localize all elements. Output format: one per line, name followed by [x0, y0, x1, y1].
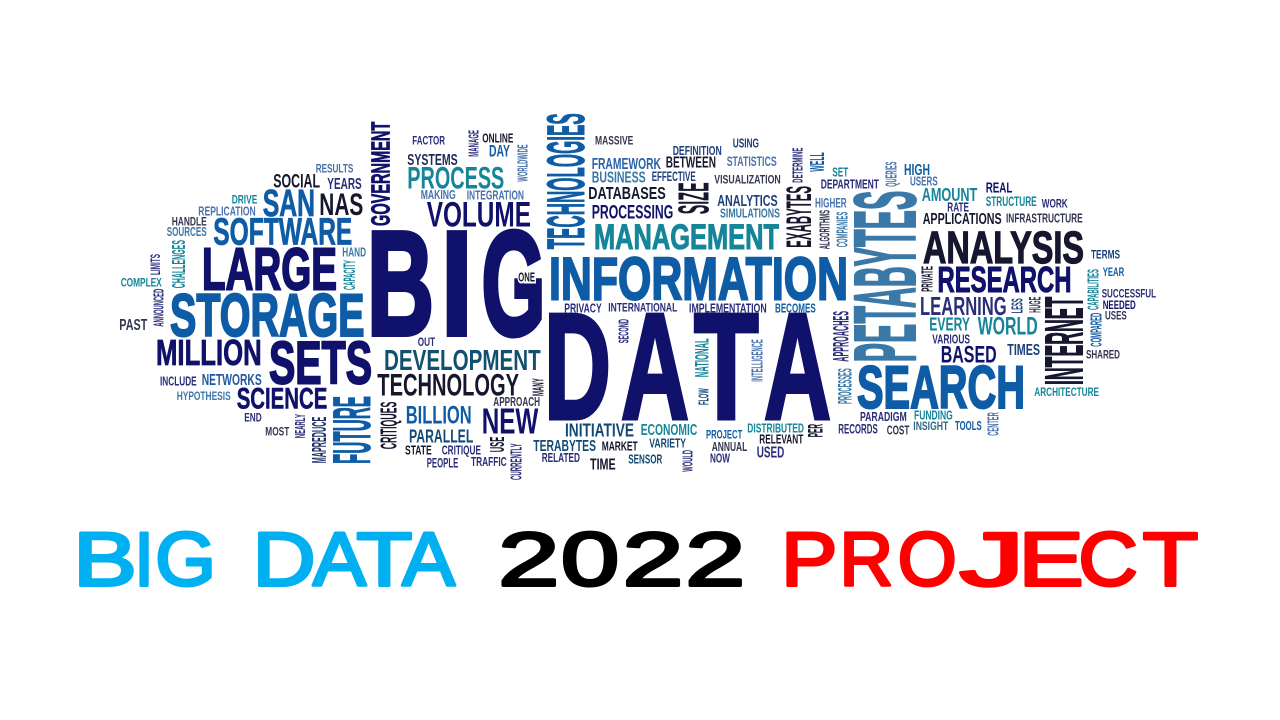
words: top-middle cluster: DETERMINE — [789, 148, 806, 183]
words: right cluster: VARIOUS — [932, 331, 970, 346]
word: NEW: NEW — [482, 400, 539, 441]
word: BIG: G — [482, 202, 546, 366]
words: upper-centre cluster: FACTOR — [412, 133, 445, 147]
words: top-middle cluster: PROCESSING — [592, 202, 673, 223]
words: right cluster: NEEDED — [1103, 298, 1136, 312]
words: upper-right cluster: HIGH — [904, 162, 930, 179]
words: lower-left cluster — [119, 289, 402, 463]
words: right cluster: APPROACHES — [828, 311, 853, 362]
words: lower-centre cluster: ANNUAL — [712, 440, 748, 454]
word: SEARCH: SEARCH — [857, 354, 1025, 421]
words: lower-left cluster: INCLUDE — [160, 375, 197, 389]
words: right cluster: PROCESSES — [836, 368, 857, 404]
words: upper-left cluster: RESULTS — [316, 161, 353, 175]
title word: 2022: 2 — [685, 518, 745, 602]
word cloud: MANAGE — [465, 130, 482, 157]
words: top-middle cluster: FRAMEWORK — [592, 156, 661, 173]
words: upper-centre cluster: INTEGRATION — [467, 187, 524, 202]
words: lower-centre cluster: MANY — [530, 378, 547, 396]
title word: BIG DATA: A — [313, 518, 366, 602]
word cloud: SIZE — [669, 182, 718, 214]
words: right cluster: TOOLS — [955, 418, 982, 433]
words: lower-centre cluster: BECOMES — [775, 300, 816, 315]
words: right cluster: SHARED — [1086, 347, 1120, 361]
word: DATA: A — [764, 282, 831, 450]
title word: PROJECT: C — [1078, 518, 1138, 602]
word: STORAGE: STORAGE — [170, 282, 364, 349]
words: lower-left cluster: MOST — [265, 424, 290, 438]
words: upper-left cluster: HANDLE — [172, 215, 207, 229]
words: top-middle cluster: STATISTICS — [727, 154, 777, 169]
words: top-middle cluster: DEFINITION — [673, 143, 722, 158]
word: SAN: SAN — [263, 183, 315, 225]
word: NAS: NAS — [319, 186, 363, 222]
title word: BIG DATA: T — [356, 518, 412, 602]
words: upper-left cluster: CAPACITY — [340, 260, 359, 290]
words: upper-right cluster: RATE — [947, 200, 969, 215]
words: top-middle cluster: EFFECTIVE — [652, 169, 696, 184]
word cloud: INTERNET — [1034, 297, 1094, 385]
words: right cluster — [828, 247, 1156, 437]
words: upper-left cluster: LIMITS — [147, 254, 163, 275]
words: right cluster: EVERY — [929, 315, 970, 335]
words: right cluster: RECORDS — [838, 421, 878, 436]
word: BIG: B — [367, 202, 434, 366]
words: lower-centre cluster: PEOPLE — [427, 456, 458, 471]
word cloud — [119, 113, 1156, 480]
words: lower-centre cluster: INITIATIVE — [565, 421, 634, 441]
words: upper-right cluster: USERS — [910, 174, 938, 189]
words: upper-centre cluster: SYSTEMS — [407, 152, 458, 169]
words: upper-right cluster: WORK — [1042, 197, 1068, 211]
word: LEARNING: LEARNING — [920, 293, 1007, 321]
words: lower-left cluster: NEARLY — [293, 414, 309, 438]
words: lower-centre cluster: SECOND — [615, 319, 632, 343]
words: upper-right cluster: DEPARTMENT — [821, 176, 879, 191]
words: lower-centre cluster: PER — [805, 424, 828, 437]
title word: BIG DATA: A — [402, 518, 455, 602]
word: ANALYSIS: ANALYSIS — [923, 222, 1084, 273]
words: lower-centre cluster: DISTRIBUTED — [747, 420, 804, 435]
words: right cluster: TERMS — [1091, 247, 1120, 261]
words: right cluster: TIMES — [1007, 342, 1040, 359]
words: upper-centre cluster: OUT — [418, 335, 435, 349]
words: upper-right cluster: INFRASTRUCTURE — [1006, 212, 1083, 226]
words: upper-right cluster: APPLICATIONS — [923, 211, 1002, 228]
title word: 2022: 0 — [561, 518, 619, 602]
words: lower-centre cluster: TRAFFIC — [471, 455, 507, 469]
words: upper-right cluster: STRUCTURE — [986, 194, 1037, 209]
word: DEVELOPMENT: DEVELOPMENT — [384, 345, 541, 377]
title word: BIG DATA: G — [155, 518, 216, 602]
words: upper-left cluster: HAND — [342, 245, 366, 260]
words: right cluster: COST — [887, 423, 909, 437]
words: upper-left cluster: CHALLENGES — [169, 240, 189, 288]
words: lower-centre cluster: NATIONAL — [692, 338, 713, 377]
words: right cluster: INSIGHT — [913, 419, 949, 433]
words: right cluster: SUCCESSFUL — [1102, 287, 1156, 301]
word: VOLUME: VOLUME — [427, 195, 531, 235]
word: LARGE: LARGE — [202, 236, 337, 302]
words: top-middle cluster: USING — [733, 135, 759, 150]
words: upper-centre cluster: DAY — [489, 142, 510, 161]
words: lower-centre cluster — [405, 300, 828, 480]
word cloud: ANNOUNCED — [150, 289, 167, 327]
words: upper-right cluster: SET — [832, 165, 848, 180]
words: upper-centre cluster: MAKING — [421, 187, 456, 202]
words: lower-centre cluster: VARIETY — [649, 435, 686, 450]
word: DATA: T — [694, 282, 759, 450]
words: top-middle cluster: VISUALIZATION — [714, 172, 781, 186]
words: upper-left cluster: DRIVE — [232, 192, 257, 206]
words: right cluster: ARCHITECTURE — [1034, 385, 1099, 399]
words: upper-left cluster — [121, 161, 366, 290]
word: DATA: A — [621, 282, 689, 450]
words: lower-centre cluster: FLOW — [695, 388, 712, 405]
words: top-middle cluster: ANALYTICS — [717, 193, 778, 210]
words: lower-centre cluster: TERABYTES — [533, 438, 596, 455]
words: lower-centre cluster: MARKET — [602, 439, 638, 454]
word: DATA: D — [544, 282, 611, 450]
words: upper-centre cluster: ONE — [518, 271, 535, 285]
word: BASED: BASED — [941, 342, 997, 369]
words: lower-centre cluster: STATE — [405, 443, 432, 457]
words: upper-right cluster: REAL — [986, 180, 1012, 196]
words: lower-centre cluster: INTERNATIONAL — [608, 301, 678, 315]
words: right cluster: FUNDING — [914, 408, 953, 422]
word: TECHNOLOGY: TECHNOLOGY — [377, 367, 519, 403]
words: lower-centre cluster: RELEVANT — [759, 431, 803, 446]
words: lower-centre cluster: PRIVACY — [564, 301, 602, 316]
words: right cluster: PRIVATE — [920, 266, 937, 292]
words: upper-right cluster: COMPANIES — [835, 212, 852, 247]
title word: PROJECT: P — [781, 518, 838, 602]
words: upper-centre cluster — [407, 130, 535, 349]
words: lower-left cluster: PAST — [119, 317, 148, 334]
words: right cluster: CENTER — [985, 412, 1002, 436]
words: lower-left cluster: END — [244, 411, 262, 425]
words: top-middle cluster: WELL — [807, 152, 829, 172]
words: upper-left cluster: SOURCES — [167, 225, 207, 239]
words: upper-centre cluster: WORLDWIDE — [514, 144, 531, 182]
words: upper-left cluster: SOCIAL — [273, 171, 320, 192]
words: lower-centre cluster: WOULD — [679, 450, 696, 472]
title word: PROJECT: R — [840, 518, 893, 602]
words: upper-right cluster — [815, 162, 1083, 247]
words: right cluster: LESS — [1010, 298, 1027, 313]
words: lower-centre cluster: ECONOMIC — [641, 422, 698, 439]
words: right cluster: USES — [1105, 308, 1127, 322]
words: lower-left cluster: NETWORKS — [202, 372, 262, 389]
title word: 2022: 2 — [498, 518, 560, 602]
word: MANAGEMENT: MANAGEMENT — [594, 218, 779, 257]
title word: BIG DATA: I — [134, 518, 154, 602]
words: right cluster: HUGE — [1026, 297, 1045, 313]
words: lower-left cluster: CRITIQUES — [376, 402, 402, 449]
words: upper-right cluster: HIGHER — [815, 196, 847, 211]
words: lower-left cluster: MAPREDUCE — [309, 417, 331, 463]
word: PROCESS: PROCESS — [407, 160, 504, 195]
title word: BIG DATA: B — [73, 518, 137, 602]
words: top-middle cluster: BUSINESS — [592, 170, 646, 187]
words: lower-centre cluster: TIME — [590, 456, 616, 473]
word: BIG: I — [441, 202, 473, 366]
title word: PROJECT: T — [1143, 518, 1198, 602]
word: RESEARCH: RESEARCH — [938, 259, 1072, 300]
words: upper-centre cluster: ONLINE — [482, 130, 513, 145]
word: SOFTWARE: SOFTWARE — [213, 211, 352, 253]
title word: 2022: 2 — [623, 518, 684, 602]
words: right cluster: CAPABILITIES — [1085, 269, 1102, 310]
words: top-middle cluster — [588, 133, 833, 249]
words: upper-left cluster: COMPLEX — [121, 276, 162, 290]
words: upper-left cluster: YEARS — [327, 176, 362, 193]
words: lower-centre cluster: NOW — [710, 450, 730, 465]
words: top-middle cluster: BETWEEN — [666, 154, 716, 171]
words: lower-left cluster: HYPOTHESIS — [177, 389, 231, 403]
words: lower-centre cluster: PARALLEL — [409, 426, 473, 447]
words: lower-centre cluster: PROJECT — [706, 427, 743, 441]
words: right cluster: YEAR — [1103, 265, 1125, 279]
word: MILLION: MILLION — [156, 332, 262, 373]
words: lower-centre cluster: USE — [487, 437, 509, 452]
word: SCIENCE: SCIENCE — [237, 382, 327, 415]
words: top-middle cluster: SIMULATIONS — [720, 205, 780, 220]
word cloud: EXABYTES — [780, 186, 819, 248]
title word: PROJECT: E — [1018, 518, 1084, 602]
words: right cluster: COMPARED — [1089, 313, 1106, 347]
words: lower-centre cluster: INTELLIGENCE — [750, 339, 767, 382]
word cloud: FUTURE — [323, 396, 382, 464]
words: top-middle cluster: DATABASES — [588, 183, 666, 203]
words: lower-centre cluster: IMPLEMENTATION — [689, 300, 767, 315]
word: SETS: SETS — [269, 330, 372, 396]
words: top-middle cluster: MASSIVE — [595, 133, 633, 147]
words: right cluster: PARADIGM — [860, 409, 907, 424]
title: BIG DATA 2022 PROJECT — [73, 518, 1198, 602]
words: upper-left cluster: REPLICATION — [198, 204, 256, 218]
word: GOVERNMENT: GOVERNMENT — [367, 121, 395, 226]
words: lower-centre cluster: RELATED — [542, 451, 580, 465]
words: lower-centre cluster: SENSOR — [628, 451, 663, 466]
word: WORLD: WORLD — [978, 313, 1038, 340]
words: lower-centre cluster: CRITIQUE — [442, 442, 481, 457]
words: lower-centre cluster: APPROACH — [493, 394, 540, 409]
word: BILLION: BILLION — [406, 401, 472, 429]
words: lower-centre cluster: USED — [757, 445, 784, 462]
words: top-middle cluster: ALGORITHMS — [816, 210, 833, 249]
word cloud: QUERIES — [884, 162, 901, 187]
word: AMOUNT: AMOUNT — [922, 184, 978, 205]
word: INFORMATION: INFORMATION — [549, 246, 848, 312]
title word: BIG DATA: D — [253, 518, 316, 602]
title word: PROJECT: J — [959, 518, 1025, 602]
title word: PROJECT: O — [898, 518, 957, 602]
words: lower-centre cluster: CURRENTLY — [509, 443, 526, 480]
